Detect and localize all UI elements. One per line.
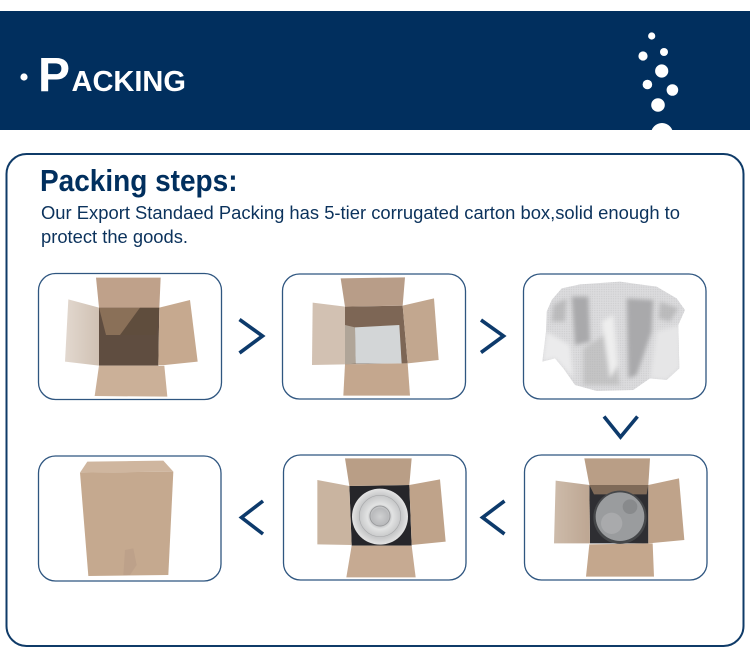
arrow: step 3 to 4 [604, 416, 638, 437]
main panel [6, 154, 744, 646]
section title [20, 49, 186, 102]
arrow: step 5 to 6 [242, 501, 263, 534]
arrow: step 4 to 5 [482, 501, 504, 534]
description text: protect the goods. [41, 226, 188, 247]
arrow: step 2 to 3 [481, 320, 504, 352]
section title: P [38, 49, 70, 102]
header banner [0, 11, 750, 145]
step 1: empty carton [38, 274, 222, 400]
description text: Our Export Standaed Packing has 5-tier corrugated carton box,solid enough to [41, 202, 680, 223]
decorative bubbles [638, 32, 678, 145]
arrow: step 1 to 2 [240, 320, 262, 353]
section title: ACKING [72, 66, 186, 98]
step 4: wrapped pot in carton [524, 455, 707, 580]
description text [41, 202, 680, 247]
step 2: carton with foam base [282, 274, 466, 399]
heading: packing steps: Packing steps: [40, 165, 238, 198]
step 3: pot in bubble wrap [524, 274, 706, 399]
step 6: sealed carton [38, 456, 221, 581]
step 5: pot with lid in carton [284, 455, 466, 580]
